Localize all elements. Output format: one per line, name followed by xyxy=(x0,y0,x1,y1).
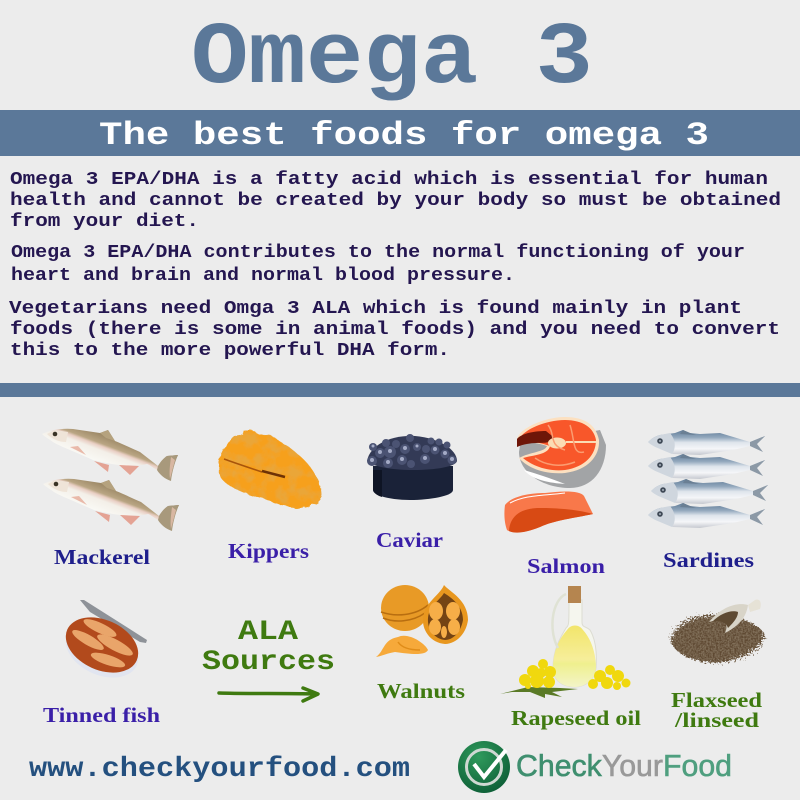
icon: mackerel xyxy=(42,429,179,531)
subtitle banner: The best foods for omega 3 xyxy=(99,117,709,154)
divider bar xyxy=(0,383,800,397)
label: flaxseed xyxy=(671,688,762,732)
intro text block: foods (there is some in animal foods) and you need to convert xyxy=(10,320,780,340)
website url: www.checkyourfood.com xyxy=(29,754,410,785)
label: mackerel: Mackerel xyxy=(54,545,150,569)
label: salmon: Salmon xyxy=(527,554,605,578)
icon: caviar xyxy=(367,434,457,500)
label: flaxseed: /linseed xyxy=(674,708,759,732)
label: kippers: Kippers xyxy=(228,539,309,563)
label: flaxseed: Flaxseed xyxy=(671,688,762,712)
intro text block: from your diet. xyxy=(10,212,199,232)
intro text block: Omega 3 EPA/DHA is a fatty acid which is essential for human xyxy=(10,170,768,190)
logo: check your food: CheckYourFood xyxy=(516,748,732,783)
title: Omega 3 xyxy=(191,10,593,109)
icon: salmon xyxy=(504,417,606,533)
icon: walnuts xyxy=(376,585,468,657)
intro text block: Omega 3 EPA/DHA contributes to the normal functioning of your xyxy=(11,243,745,263)
heading: ALA sources: ALA xyxy=(238,617,298,648)
icon: sardines xyxy=(648,430,768,528)
heading: ALA sources: Sources xyxy=(202,647,335,678)
icon: rapeseed oil xyxy=(500,586,630,698)
arrow: to ALA sources xyxy=(219,688,318,701)
intro text block xyxy=(9,170,781,361)
subtitle banner xyxy=(0,110,800,156)
heading: ALA sources xyxy=(202,617,335,678)
intro text block: Vegetarians need Omga 3 ALA which is found mainly in plant xyxy=(9,299,742,319)
label: sardines: Sardines xyxy=(663,548,754,572)
intro text block: health and cannot be created by your body so must be obtained xyxy=(10,191,781,211)
intro text block: heart and brain and normal blood pressure. xyxy=(11,266,515,286)
label: caviar: Caviar xyxy=(376,528,443,552)
label: walnuts: Walnuts xyxy=(377,679,465,703)
icon: kippers xyxy=(218,432,322,508)
label: tinned fish: Tinned fish xyxy=(43,703,160,727)
icon: flaxseed xyxy=(670,600,764,662)
intro text block: this to the more powerful DHA form. xyxy=(10,341,450,361)
logo: check your food xyxy=(458,741,732,793)
label: rapeseed oil: Rapeseed oil xyxy=(511,706,641,730)
icon: tinned fish xyxy=(57,600,147,688)
